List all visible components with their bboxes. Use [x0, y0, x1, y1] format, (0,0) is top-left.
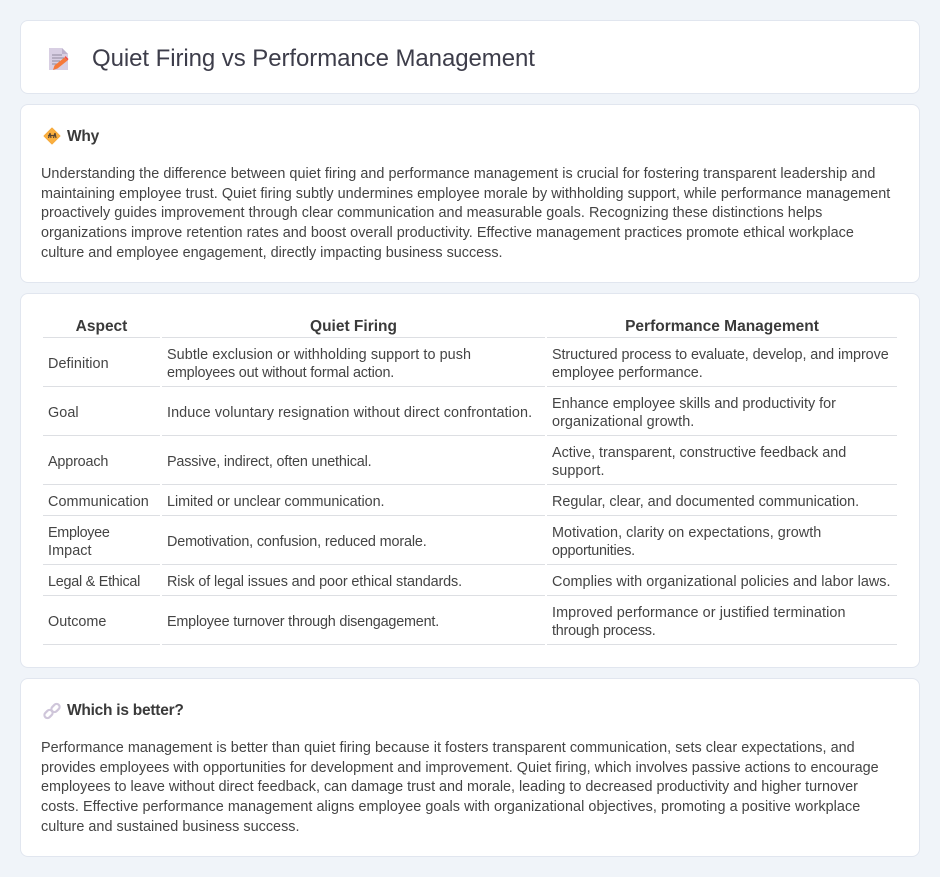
row: outcome — [43, 605, 897, 645]
row: employee impact: Impact — [48, 543, 92, 559]
row: definition — [43, 347, 897, 387]
row: approach — [43, 445, 897, 485]
row: goal: Goal — [48, 405, 79, 421]
title: Quiet Firing vs Performance Management — [92, 45, 535, 72]
row: goal: organizational growth. — [552, 414, 694, 430]
row: communication: Communication — [48, 494, 149, 510]
which is better paragraph: costs. Effective performance management aligns employee goals with organizational objectives, promoting a positive workplace — [41, 799, 860, 815]
row: approach: Passive, indirect, often unethical. — [167, 454, 371, 470]
panel: comparison table — [20, 293, 920, 668]
row: legal and ethical: Risk of legal issues and poor ethical standards. — [167, 574, 462, 590]
row: definition: Structured process to evaluate, develop, and improve — [552, 347, 889, 363]
which is better paragraph: culture and sustained business success. — [41, 819, 300, 835]
row: legal and ethical — [43, 574, 897, 596]
row: goal: Induce voluntary resignation without direct confrontation. — [167, 405, 532, 421]
row: communication: Limited or unclear communication. — [167, 494, 385, 510]
why paragraph: organizations improve retention rates and boost overall productivity. Effective management practices promote ethical workplace — [41, 225, 854, 241]
which is better paragraph: Performance management is better than quiet firing because it fosters transparent communication, sets clear expectations, and — [41, 740, 855, 756]
why paragraph: Understanding the difference between quiet firing and performance management is crucial for fostering transparent leadership and — [41, 166, 875, 182]
row: communication — [43, 494, 897, 516]
row: definition: Subtle exclusion or withholding support to push — [167, 347, 471, 363]
row: employee impact — [43, 525, 897, 565]
why paragraph: maintaining employee trust. Quiet firing subtly undermines employee morale by withholding support, while performance management — [41, 186, 890, 202]
why paragraph: proactively guides improvement through clear communication and measurable goals. Recognizing these distinctions helps — [41, 205, 822, 221]
row: approach: support. — [552, 463, 605, 479]
row: legal and ethical: Complies with organizational policies and labor laws. — [552, 574, 891, 590]
panel: title header — [20, 20, 920, 94]
table column headers: Aspect — [76, 318, 127, 335]
row: outcome: Employee turnover through disengagement. — [167, 614, 439, 630]
row: outcome: Improved performance or justified termination — [552, 605, 846, 621]
table column headers: Quiet Firing — [310, 318, 397, 335]
row: communication: Regular, clear, and documented communication. — [552, 494, 859, 510]
icon: document with pencil — [49, 48, 68, 70]
heading: which is better: Which is better? — [67, 702, 184, 719]
row: employee impact: opportunities. — [552, 543, 635, 559]
why paragraph: culture and employee engagement, directly impacting business success. — [41, 245, 503, 261]
icon: chain link — [43, 702, 61, 720]
row: employee impact: Employee — [48, 525, 110, 541]
which is better paragraph — [41, 740, 879, 835]
panel: which is better — [20, 678, 920, 857]
row: outcome: through process. — [552, 623, 656, 639]
row: outcome: Outcome — [48, 614, 106, 630]
row: definition: Definition — [48, 356, 109, 372]
row: goal — [43, 396, 897, 436]
table column headers — [43, 318, 897, 338]
row: legal and ethical: Legal & Ethical — [48, 574, 140, 590]
row: employee impact: Motivation, clarity on expectations, growth — [552, 525, 821, 541]
panel: why — [20, 104, 920, 283]
row: goal: Enhance employee skills and productivity for — [552, 396, 836, 412]
row: definition: employee performance. — [552, 365, 703, 381]
row: employee impact: Demotivation, confusion, reduced morale. — [167, 534, 427, 550]
row: approach: Active, transparent, constructive feedback and — [552, 445, 846, 461]
which is better paragraph: provides employees with opportunities for development and improvement. Quiet firing, which involves passive actions to encourage — [41, 760, 879, 776]
row: approach: Approach — [48, 454, 108, 470]
table column headers: Performance Management — [625, 318, 819, 335]
icon: construction diamond — [44, 128, 60, 144]
heading: why: Why — [67, 128, 99, 145]
why paragraph — [41, 166, 890, 261]
row: definition: employees out without formal action. — [167, 365, 394, 381]
which is better paragraph: employees to leave without direct feedback, can damage trust and morale, leading to decreased productivity and higher turnover — [41, 779, 858, 795]
